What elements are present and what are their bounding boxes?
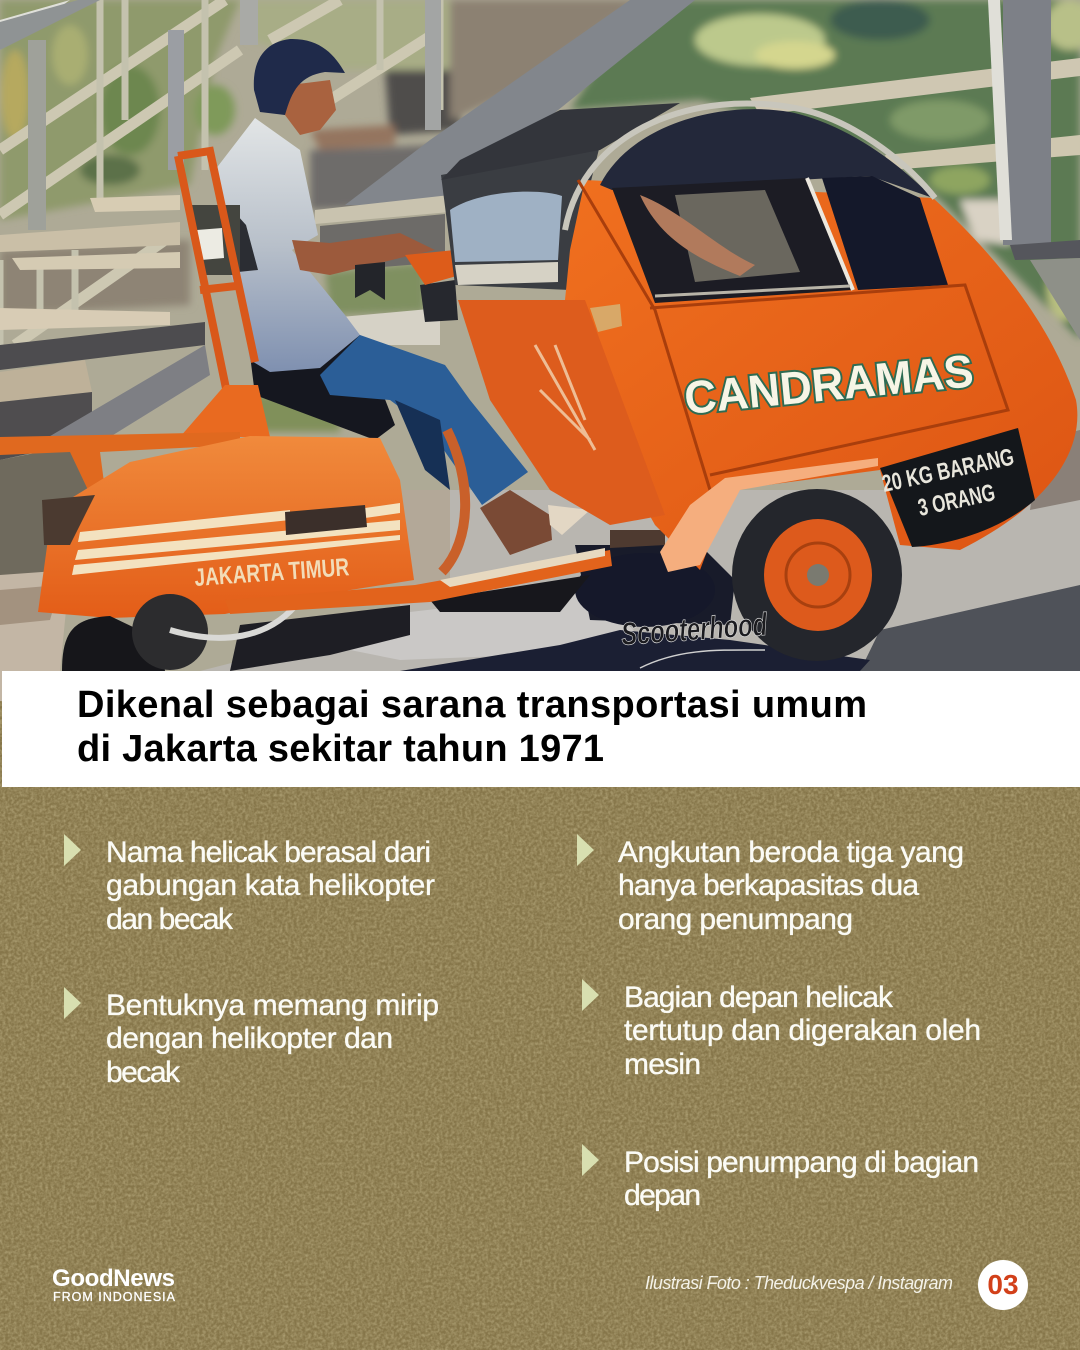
- windows: [612, 178, 852, 303]
- bullet: nama helicak: Nama helicak berasal dari: [106, 836, 431, 869]
- bullet: posisi penumpang: Posisi penumpang di bagian: [624, 1146, 979, 1179]
- bullet: beroda tiga: [577, 834, 964, 936]
- chassis and footboard: [225, 530, 735, 627]
- bullet: bentuk: Bentuknya memang mirip: [106, 989, 439, 1022]
- bullet: posisi penumpang: depan: [624, 1179, 701, 1212]
- watermark: Scooterhood: [620, 606, 769, 652]
- bullet: beroda tiga: Angkutan beroda tiga yang: [618, 836, 964, 869]
- bullet: bentuk: dengan helikopter dan: [106, 1022, 393, 1055]
- grey beam and platform: [345, 0, 695, 205]
- bullet: beroda tiga: hanya berkapasitas dua: [618, 869, 919, 902]
- scooter rear body: [38, 436, 414, 671]
- handlebar controls: [355, 250, 460, 322]
- heading panel: [2, 671, 1080, 787]
- black capacity panel: [880, 428, 1035, 547]
- photo background: stairs and greenery: [0, 0, 1080, 671]
- page number: 03: [987, 1269, 1019, 1300]
- door lines: [578, 180, 1008, 490]
- bullet: bagian depan: Bagian depan helicak: [624, 981, 894, 1014]
- cabin front: [441, 103, 1077, 661]
- front wheel: [732, 489, 902, 661]
- logo: GoodNews from Indonesia: FROM INDONESIA: [53, 1290, 176, 1304]
- bullet: bagian depan: tertutup dan digerakan oleh: [624, 1014, 981, 1047]
- jeans: [320, 335, 528, 505]
- label: JAKARTA TIMUR: JAKARTA TIMUR: [193, 553, 350, 592]
- black capacity panel: 20 KG BARANG: [880, 444, 1016, 498]
- heading panel: di Jakarta sekitar tahun 1971: [77, 728, 604, 770]
- label: CANDRAMAS: CANDRAMAS: [682, 344, 976, 424]
- heading panel: Dikenal sebagai sarana transportasi umum: [77, 684, 867, 726]
- bullet: bentuk: becak: [106, 1056, 181, 1089]
- page number: [978, 1260, 1028, 1310]
- bullet: beroda tiga: orang penumpang: [618, 903, 853, 936]
- bullet: nama helicak: [64, 834, 435, 936]
- bullet: posisi penumpang: [582, 1144, 979, 1212]
- bullet: bagian depan: mesin: [624, 1048, 701, 1081]
- left photo sliver: [0, 671, 2, 701]
- logo: GoodNews from Indonesia: GoodNews: [52, 1265, 175, 1292]
- bullet: nama helicak: dan becak: [106, 903, 234, 936]
- door scratch marks: [535, 345, 595, 450]
- photo credit: Ilustrasi Foto : Theduckvespa / Instagram: [645, 1273, 953, 1293]
- photo: helicak with driver: [0, 0, 1080, 671]
- stair rails: [0, 0, 440, 345]
- right rails and post: [750, 58, 1080, 115]
- road: [200, 490, 1080, 671]
- roof: [600, 109, 933, 198]
- bullet: bentuk: [64, 987, 439, 1089]
- watermark: [620, 606, 769, 668]
- windshield unit: [441, 145, 600, 290]
- trim: [660, 458, 878, 572]
- black capacity panel: 3 ORANG: [916, 479, 998, 522]
- bullet: bagian depan: [582, 979, 981, 1081]
- orange shell: [560, 180, 1077, 570]
- rear rack and seat: [0, 151, 270, 490]
- logo: GoodNews from Indonesia: [52, 1265, 176, 1304]
- bullet: nama helicak: gabungan kata helikopter: [106, 869, 435, 902]
- driver: [215, 39, 590, 572]
